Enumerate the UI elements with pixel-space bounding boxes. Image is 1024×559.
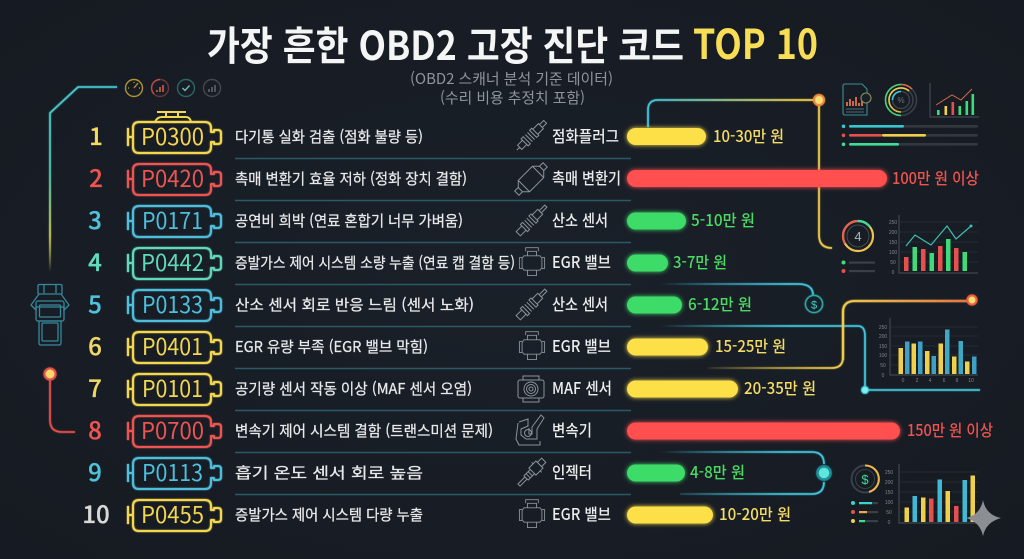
cost row 8: 150만 원 이상: [907, 417, 993, 441]
description row 2: 촉매 변환기 효율 저하 (정화 장치 결함): [235, 168, 467, 189]
bar chart lower: 200: [879, 334, 887, 340]
bar chart lower: 150: [879, 344, 887, 350]
row 3: 3: [88, 201, 102, 236]
label EGR 밸브 row 10: EGR 밸브: [552, 501, 611, 525]
mini line chart top: [930, 83, 979, 117]
row 10: [82, 495, 221, 531]
code badge P0101: P0101: [142, 370, 203, 404]
description row 3: 공연비 희박 (연료 혼합기 너무 가벼움): [235, 210, 463, 231]
subtitle: (수리 비용 추정치 포함): [440, 87, 585, 108]
code badge P0455: P0455: [141, 496, 204, 530]
row 1: [89, 112, 221, 153]
bar chart lower: 8: [956, 378, 959, 384]
bar row 8: [627, 422, 900, 440]
bar row 5: [627, 296, 682, 314]
bar chart bottom: [885, 464, 978, 526]
bar chart lower: 250: [879, 325, 887, 331]
cost row 4: 3-7만 원: [673, 249, 727, 273]
subtitle: (OBD2 스캐너 분석 기준 데이터): [410, 68, 613, 89]
bar row 6: [627, 338, 708, 356]
bar chart lower: 0: [882, 373, 885, 379]
row dividers: [235, 158, 631, 494]
bar and line chart middle: 200: [889, 230, 897, 236]
icon: EGR valve row 6: [519, 332, 545, 360]
code badge P0300: P0300: [141, 118, 204, 152]
icon: report document: [843, 84, 871, 115]
title: 가장 흔한 OBD2 고장 진단 코드: [207, 14, 684, 72]
icon: EGR valve row 10: [519, 500, 545, 528]
bar chart lower: 50: [880, 363, 886, 369]
icon: oxygen sensor row 3: [515, 203, 549, 237]
label 점화플러그: 점화플러그: [552, 123, 619, 147]
left connector line: [50, 87, 117, 272]
bar chart lower: 0: [902, 378, 905, 384]
description row 5: 산소 센서 회로 반응 느림 (센서 노화): [235, 294, 474, 315]
bar chart bottom: 0: [888, 520, 891, 526]
row 5: 5: [88, 285, 102, 320]
bar chart lower: [879, 318, 978, 384]
label MAF 센서: MAF 센서: [552, 375, 612, 399]
row 9: 9: [88, 453, 102, 488]
sparkle watermark: [966, 500, 1001, 536]
dollar ring gauge: [852, 465, 879, 492]
row 4: [88, 243, 221, 279]
connector node top: [814, 95, 824, 105]
description row 7: 공기량 센서 작동 이상 (MAF 센서 오염): [235, 378, 472, 399]
bar row 7: [627, 380, 738, 398]
row 6: [88, 327, 221, 363]
subtitle: [410, 68, 613, 108]
label EGR 밸브 row 6: EGR 밸브: [552, 333, 611, 357]
bar row 4: [627, 254, 668, 272]
label 산소 센서 row 3: 산소 센서: [552, 207, 608, 231]
bar and line chart middle: 50: [890, 260, 896, 266]
bar chart lower: 100: [879, 353, 887, 359]
ring legend: [842, 260, 875, 273]
connector node cyan row 9: [818, 466, 830, 480]
row 2: 2: [89, 159, 103, 194]
bar row 3: [627, 212, 686, 230]
row 4: 4: [88, 243, 102, 278]
description row 9: 흡기 온도 센서 회로 높음: [235, 462, 423, 483]
icon: spark plug row 1: [513, 118, 549, 154]
icon: OBD scanner: [31, 284, 69, 345]
code badge P0171: P0171: [142, 202, 203, 236]
bar row 2: [627, 170, 887, 187]
description row 4: 증발가스 제어 시스템 소량 누출 (연료 캡 결함 등): [235, 252, 515, 273]
label 인젝터: 인젝터: [552, 459, 592, 483]
bar chart bottom: 150: [885, 490, 893, 496]
icon: injector: [514, 455, 549, 490]
bar and line chart middle: 0: [892, 270, 895, 276]
cost row 1: 10-30만 원: [713, 123, 784, 147]
row 5: [88, 285, 221, 321]
row 1: 1: [89, 117, 103, 152]
description row 8: 변속기 제어 시스템 결함 (트랜스미션 문제): [235, 420, 493, 441]
row 8: 8: [88, 411, 102, 446]
row 3: [88, 201, 221, 237]
description row 10: 증발가스 제어 시스템 다량 누출: [235, 504, 423, 525]
bar chart bottom: 100: [885, 500, 893, 506]
label 촉매 변환기: 촉매 변환기: [552, 165, 621, 189]
dollar ring gauge: $: [861, 472, 869, 487]
connector node dollar: [806, 296, 822, 312]
cost row 9: 4-8만 원: [690, 459, 745, 483]
bar chart lower: 2: [916, 378, 919, 384]
bar row 1: [627, 128, 706, 145]
icon: catalytic converter: [511, 159, 551, 199]
row 6: 6: [88, 327, 102, 362]
icon: percent ring: [886, 84, 916, 116]
bar and line chart middle: [889, 215, 978, 276]
code badge P0442: P0442: [141, 244, 204, 278]
cost row 5: 6-12만 원: [688, 291, 752, 315]
right connector lines behind bars: [648, 100, 980, 494]
row 2: [89, 159, 221, 195]
code badge P0133: P0133: [142, 286, 203, 320]
cost row 3: 5-10만 원: [691, 207, 755, 231]
label 변속기: 변속기: [552, 417, 592, 441]
bar chart lower: 4: [929, 378, 932, 384]
ring gauge 4: 4: [854, 229, 862, 244]
bar and line chart middle: 250: [889, 220, 897, 226]
code badge P0420: P0420: [141, 160, 204, 194]
connector node dollar: $: [811, 300, 817, 312]
bar and line chart middle: 150: [889, 240, 897, 246]
cost row 10: 10-20만 원: [719, 501, 791, 525]
label 산소 센서 row 5: 산소 센서: [552, 291, 608, 315]
icon: EGR valve row 4: [519, 248, 545, 276]
row 7: 7: [88, 369, 102, 404]
code badge P0401: P0401: [142, 328, 203, 362]
bar and line chart middle: 100: [889, 250, 897, 256]
progress bars top: [842, 124, 978, 146]
row 7: [88, 369, 221, 405]
status icons: [126, 80, 220, 96]
icon: transmission: [516, 415, 544, 445]
icon: oxygen sensor row 5: [515, 287, 549, 321]
bar chart bottom: 250: [885, 470, 893, 476]
label EGR 밸브 row 4: EGR 밸브: [552, 249, 611, 273]
description row 6: EGR 유량 부족 (EGR 밸브 막힘): [235, 336, 428, 357]
icon: percent ring: %: [897, 96, 905, 105]
bar chart lower: 10: [968, 378, 974, 384]
cost row 7: 20-35만 원: [744, 375, 816, 399]
title: TOP 10: [693, 11, 818, 71]
description row 1: 다기통 실화 검출 (점화 불량 등): [235, 126, 423, 147]
red connector to row 8: [44, 368, 75, 432]
ring gauge 4: [843, 221, 873, 251]
dollar ring legend: [851, 501, 878, 523]
row 8: [88, 411, 221, 447]
bar chart bottom: 50: [886, 510, 892, 516]
row 9: [88, 453, 221, 489]
icon: MAF sensor: [518, 376, 544, 402]
row 10: 10: [82, 495, 110, 530]
code badge P0113: P0113: [142, 454, 203, 488]
code badge P0700: P0700: [141, 412, 204, 446]
bar chart bottom: 200: [885, 480, 893, 486]
connector node orange: [968, 296, 976, 304]
bar row 9: [627, 464, 685, 482]
cost row 6: 15-25만 원: [715, 333, 786, 357]
bar row 10: [627, 506, 713, 524]
bar chart lower: 6: [943, 378, 946, 384]
cost row 2: 100만 원 이상: [892, 165, 979, 189]
connector node cyan mid: [862, 386, 868, 394]
